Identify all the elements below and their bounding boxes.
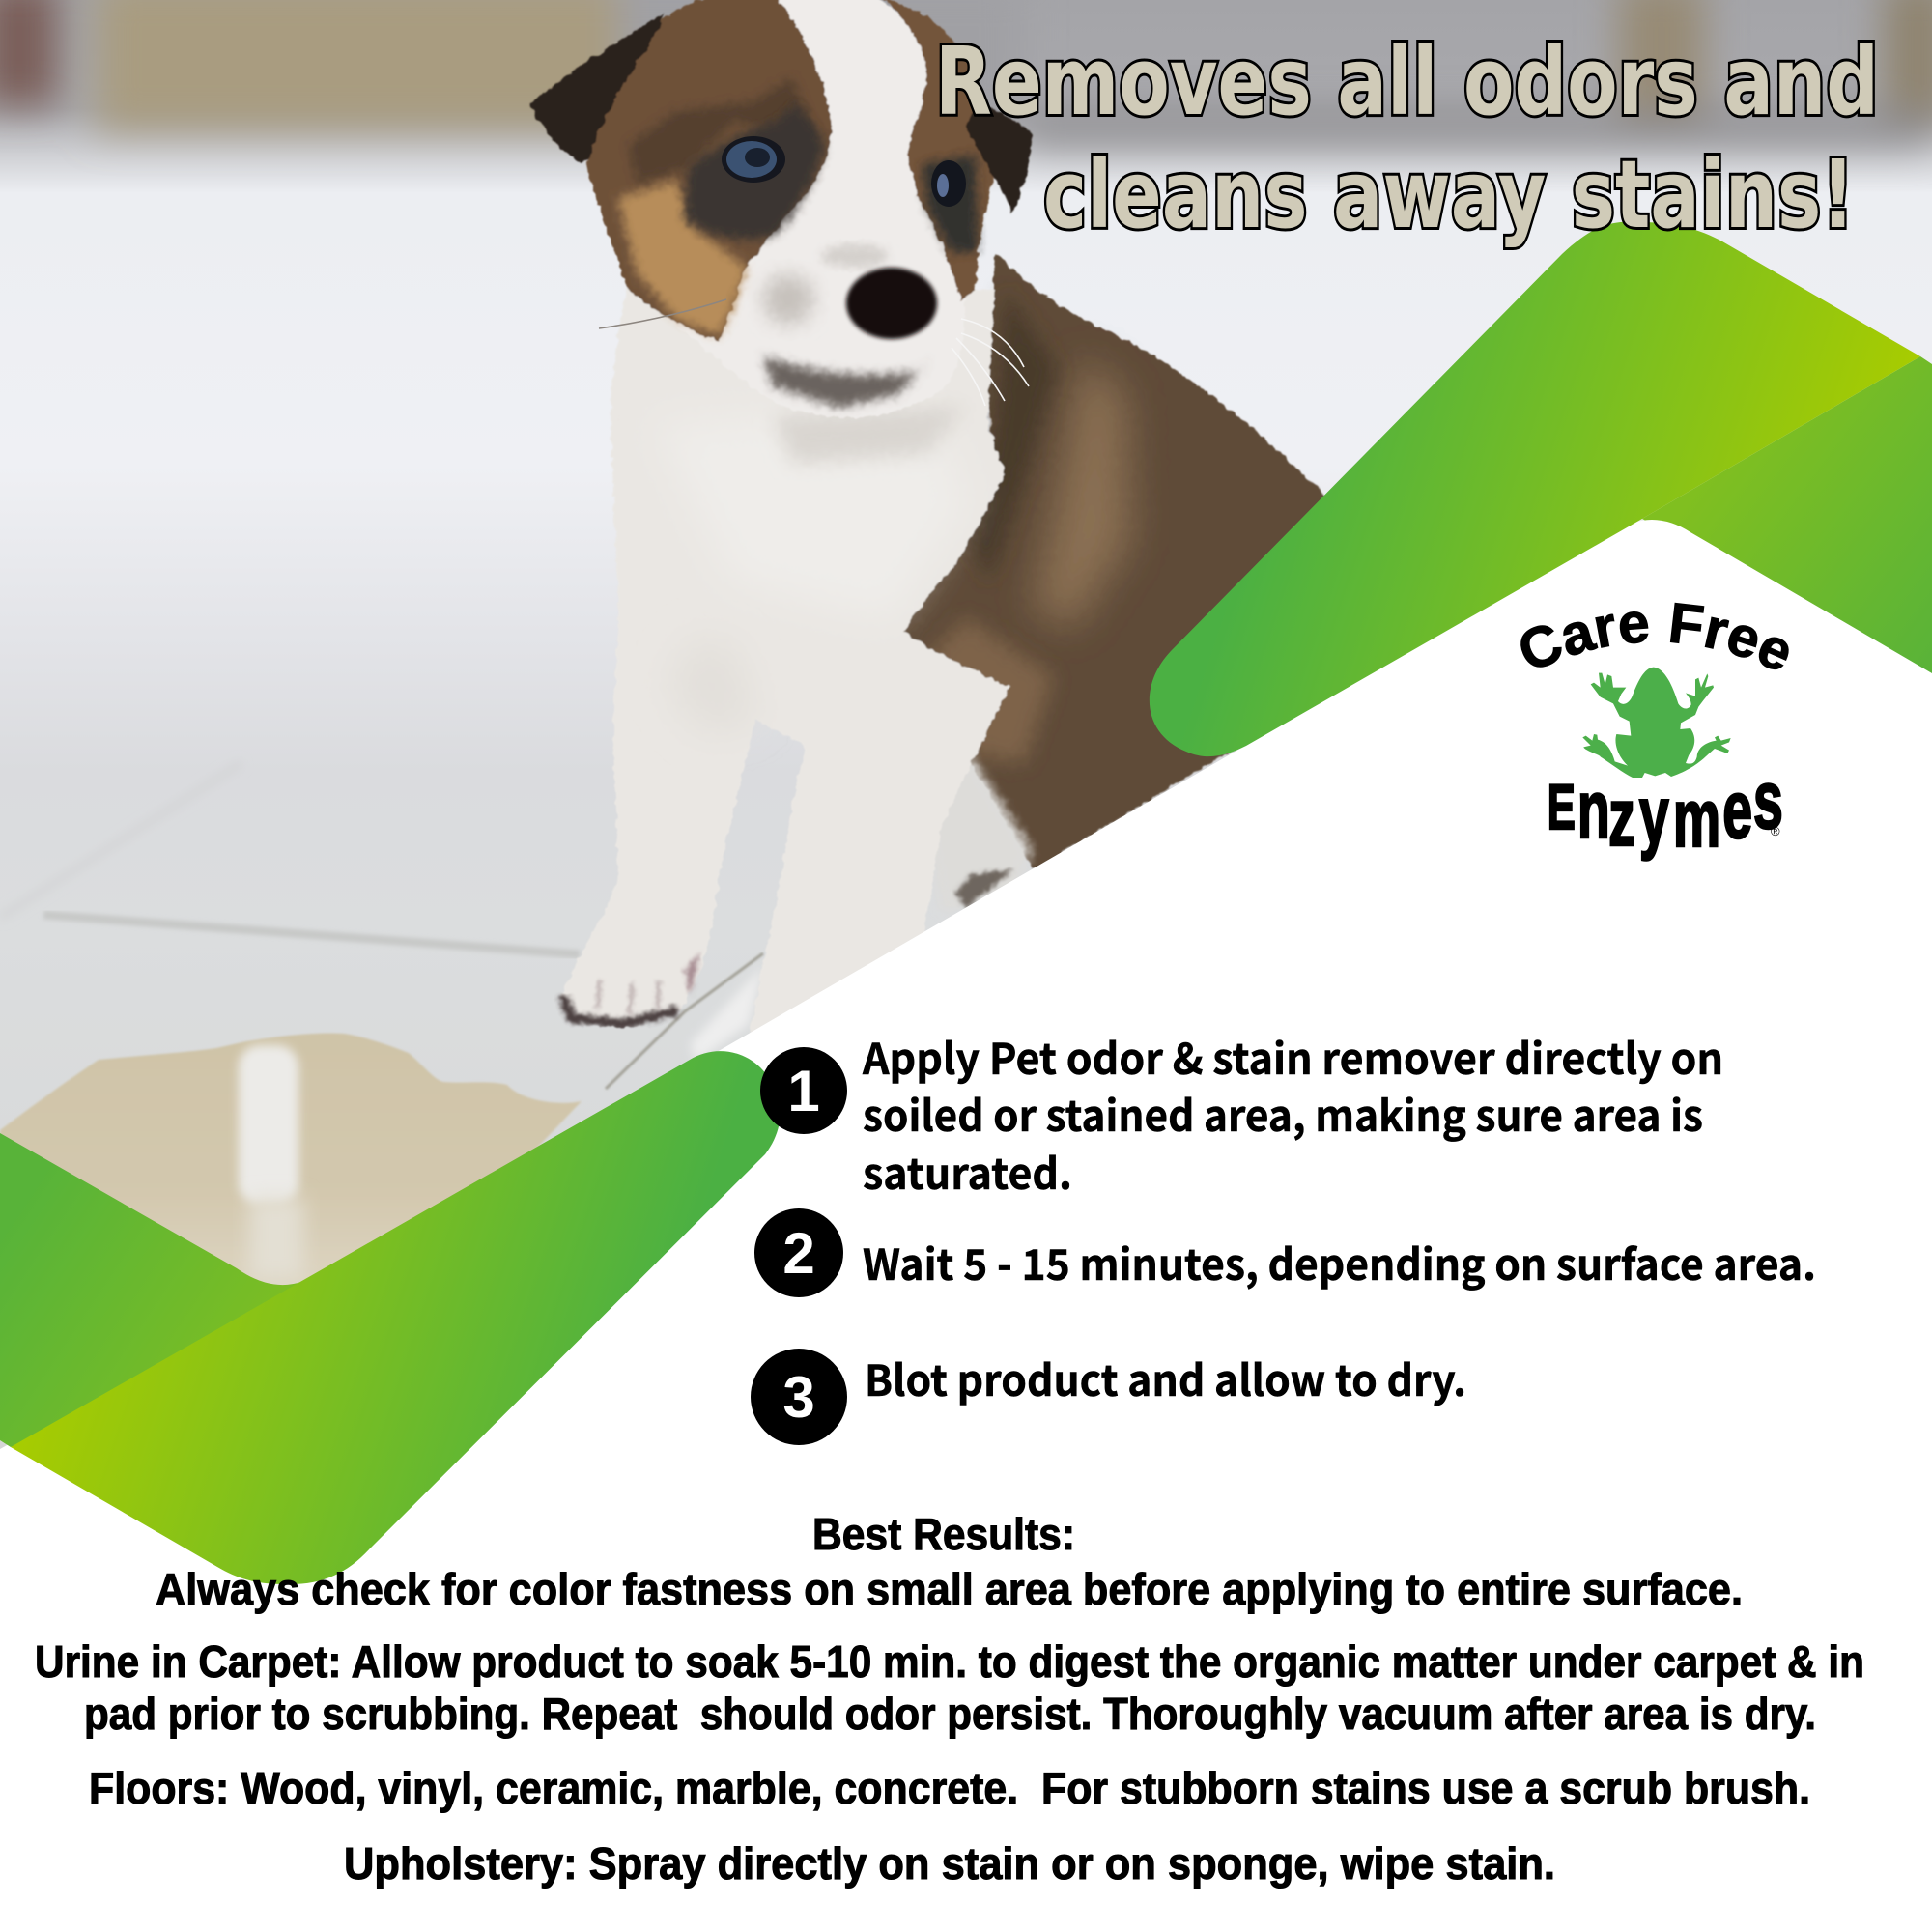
- dark eye mask: [685, 103, 824, 240]
- blurred basket and furniture: [0, 0, 1932, 145]
- green ribbon: top right bright: [1150, 222, 1920, 756]
- best results notes: Upholstery: Spray directly on stain or on sponge, wipe stain.: [344, 1838, 1555, 1889]
- step 1 text: [862, 1025, 1723, 1202]
- step 1 text: soiled or stained area, making sure area is: [863, 1082, 1703, 1144]
- green ribbon: top right dark: [1642, 356, 1932, 676]
- tan cheek: [618, 181, 747, 336]
- best results notes: [35, 1509, 1864, 1889]
- step 2: [754, 1208, 1816, 1297]
- right ear: [966, 101, 1033, 214]
- registered mark: ®: [1771, 824, 1780, 838]
- step 3: [751, 1347, 1466, 1445]
- logo text: Enzymes: nzymes: [1577, 756, 1783, 865]
- step 3 text: Blot product and allow to dry.: [865, 1347, 1466, 1408]
- left ear: [529, 14, 664, 164]
- number badge 3: [751, 1349, 847, 1445]
- step 2 text: Wait 5 - 15 minutes, depending on surface area.: [863, 1231, 1816, 1293]
- title: [935, 27, 1879, 249]
- logo: Care Free Enzymes: [1520, 603, 1789, 865]
- puddle: [0, 1033, 582, 1299]
- best results notes: Floors: Wood, vinyl, ceramic, marble, concrete. For stubborn stains use a scrub brush.: [89, 1763, 1810, 1813]
- white chest and front legs: [560, 280, 1009, 1063]
- best results notes: Best Results:: [812, 1509, 1075, 1559]
- head white: [657, 0, 967, 418]
- paw toes: [562, 952, 700, 1024]
- floor and wall background: [0, 0, 1932, 1546]
- whiskers: [599, 299, 1029, 406]
- left brown patch: [586, 0, 831, 341]
- white content panel: [0, 520, 1932, 1932]
- step 1 text: Apply Pet odor & stain remover directly on: [862, 1025, 1723, 1087]
- brown back: [898, 253, 1333, 869]
- upper patch fold: darker band: [628, 77, 821, 184]
- eyes: [722, 136, 966, 207]
- logo text: Care Free: Care Free: [1520, 603, 1789, 670]
- step 1 text: saturated.: [863, 1140, 1072, 1202]
- photo: puppy next to urine puddle: [0, 0, 1932, 1546]
- floor tile lines: [0, 763, 763, 1089]
- right brown patch: [878, 0, 995, 301]
- number badge 2: [754, 1208, 843, 1297]
- green ribbon: bottom left bright: [11, 1051, 781, 1584]
- number badge 2: 2: [782, 1221, 815, 1286]
- puppy body: [529, 0, 1333, 1063]
- step 1: [760, 1025, 1723, 1202]
- rear belly and back paw: [927, 753, 1032, 913]
- number badge 3: 3: [782, 1365, 815, 1430]
- logo text: Enzymes: E: [1548, 771, 1576, 842]
- icon: green frog: [1582, 668, 1731, 778]
- number badge 1: 1: [787, 1059, 820, 1123]
- muzzle shading and speckle: [763, 274, 813, 325]
- best results notes: pad prior to scrubbing. Repeat should odor persist. Thoroughly vacuum after area is dry.: [84, 1689, 1816, 1739]
- number badge 1: [760, 1047, 847, 1134]
- best results notes: Always check for color fastness on small area before applying to entire surface.: [156, 1564, 1743, 1614]
- nose: [846, 268, 937, 339]
- green ribbon: bottom left dark: [0, 1133, 328, 1447]
